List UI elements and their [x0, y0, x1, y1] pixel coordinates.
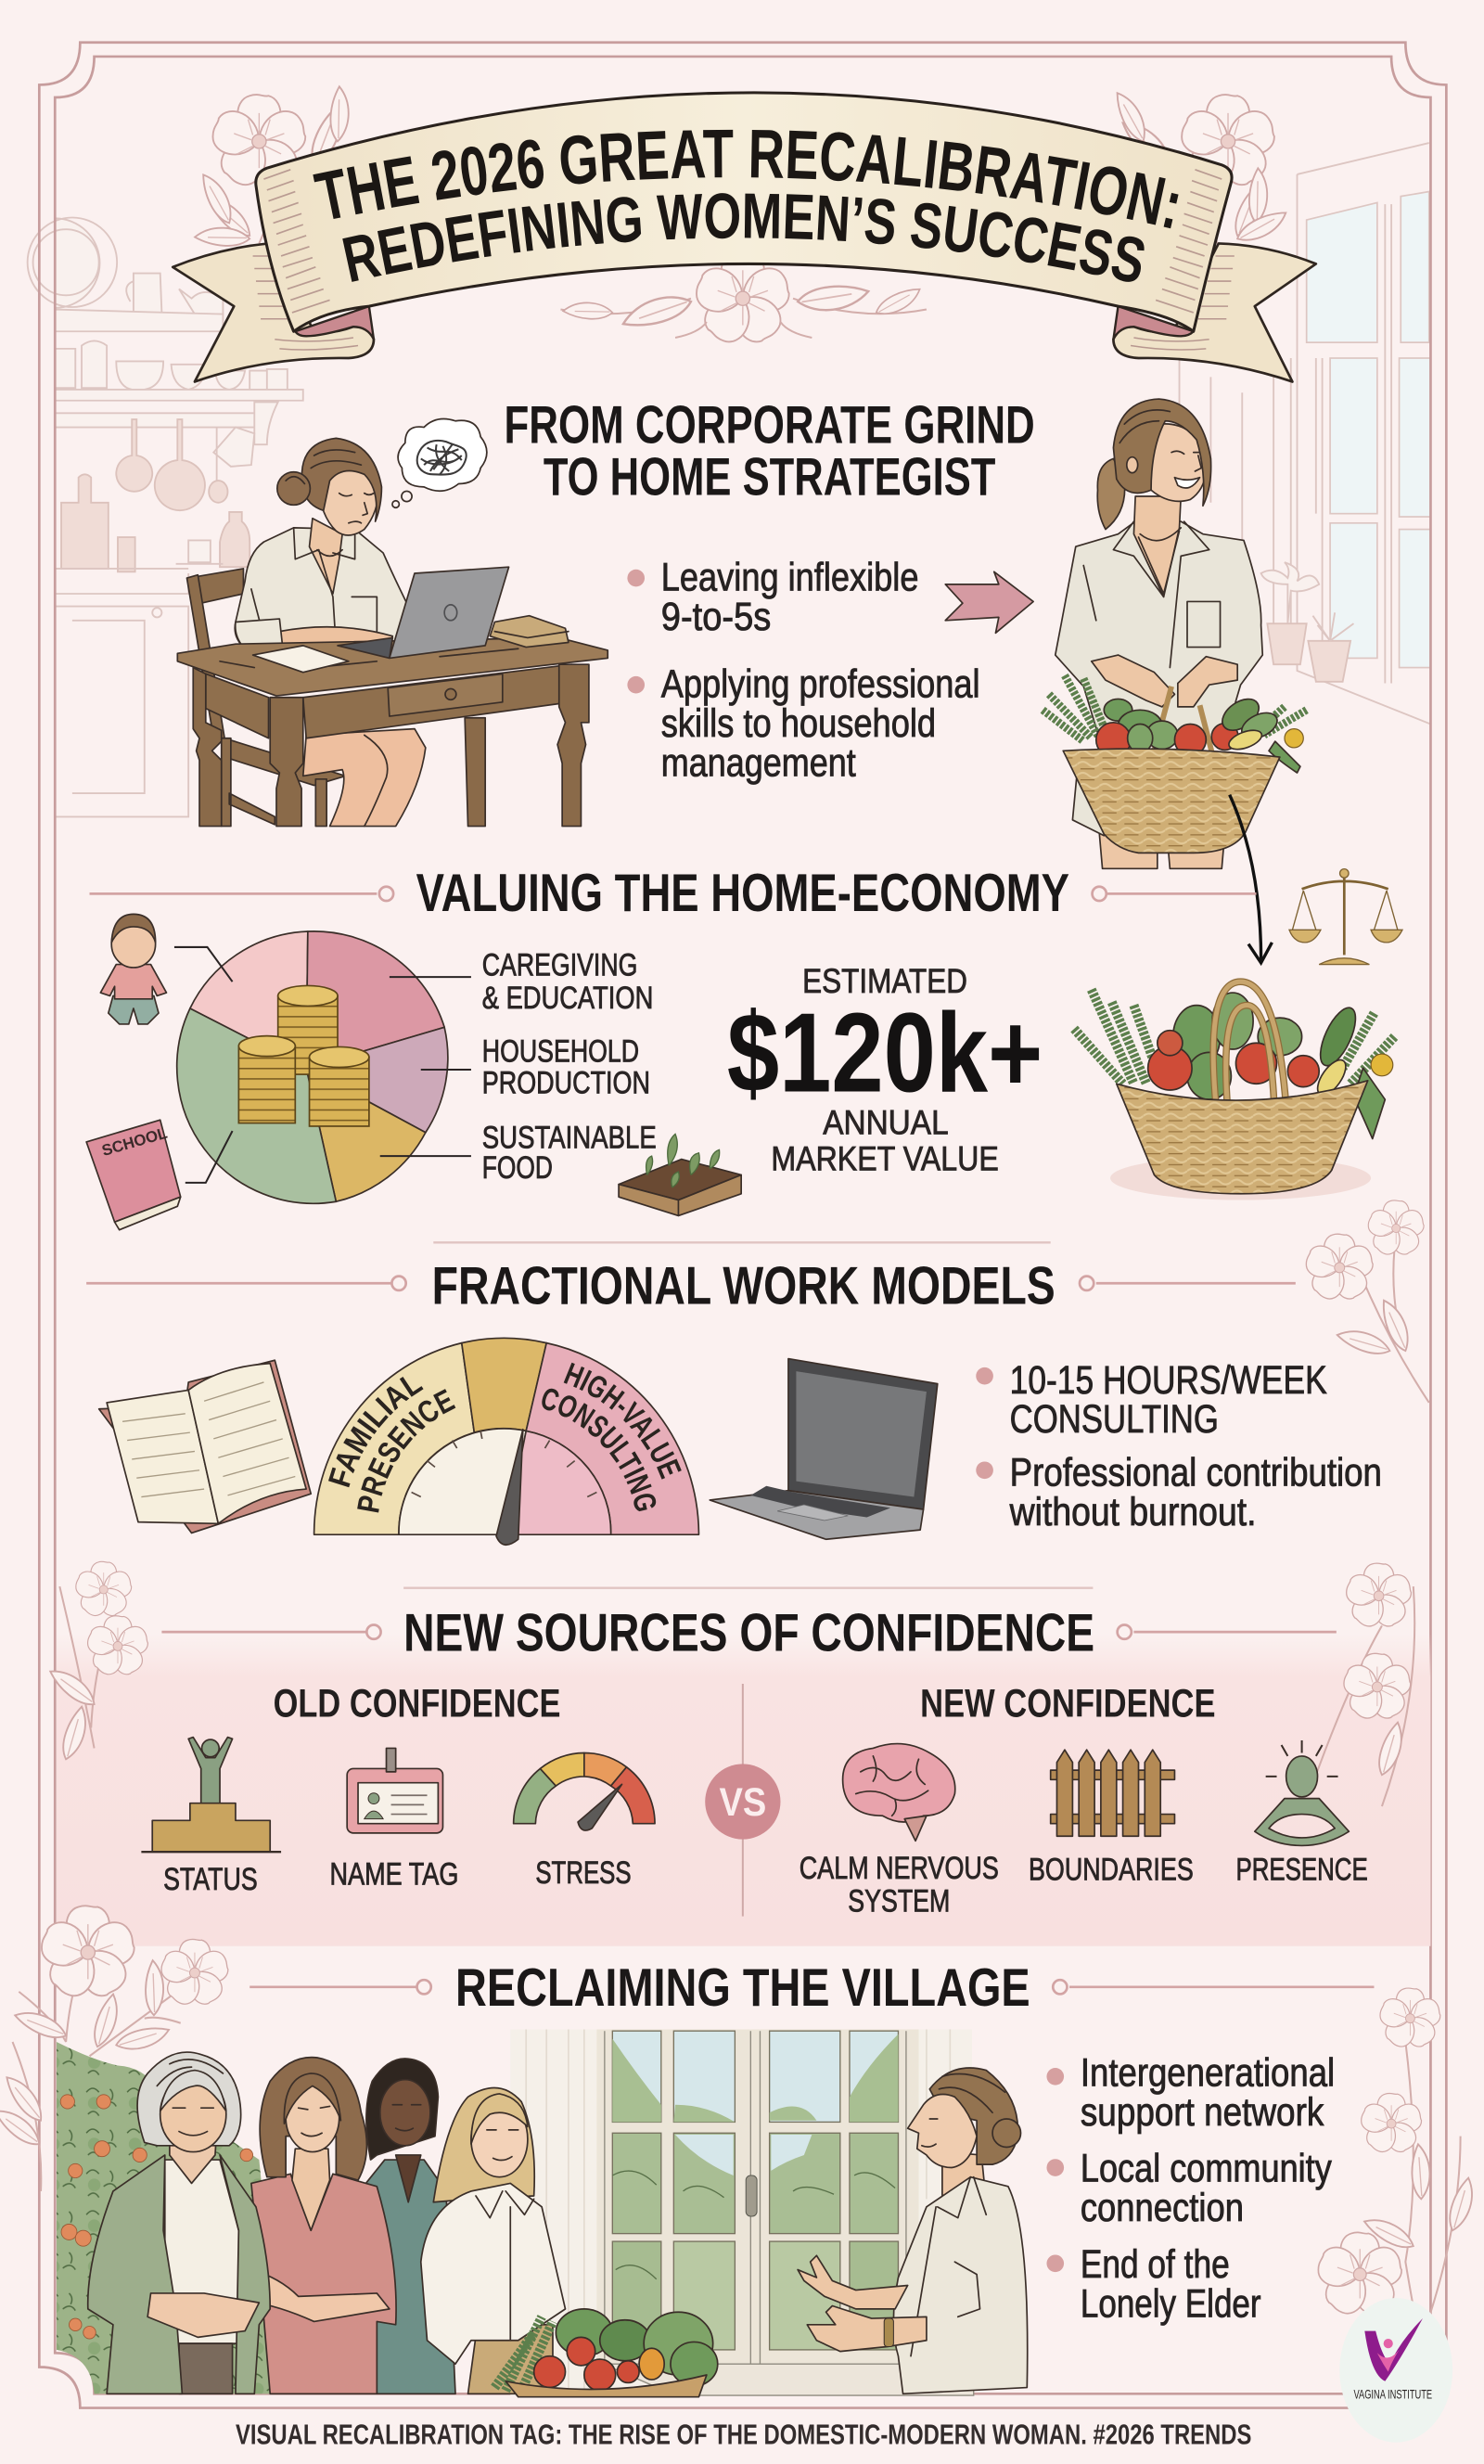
confidence labels: CALM NERVOUS [800, 1851, 999, 1886]
confidence labels: STRESS [535, 1855, 632, 1891]
forearm [279, 627, 392, 650]
illustration: reclaiming the village scene [57, 2030, 1028, 2397]
chart: fractional gauge: HIGH-VALUE [564, 1362, 682, 1480]
section 3 heading: FRACTIONAL WORK MODELS [432, 1256, 1055, 1315]
stat: market value: $120k+ [727, 990, 1043, 1116]
section 5 heading: RECLAIMING THE VILLAGE [455, 1958, 1030, 2018]
head [319, 464, 378, 535]
chart: fractional gauge [313, 1338, 699, 1546]
neck [1133, 496, 1181, 597]
vs badge: VS [719, 1780, 766, 1824]
old confidence column heading: OLD CONFIDENCE [274, 1682, 560, 1726]
woman: pink dress [249, 2058, 396, 2393]
laptop [338, 567, 509, 658]
icon: child [100, 914, 166, 1024]
shirt [1055, 521, 1262, 738]
thought bubble [392, 418, 487, 507]
hair [301, 438, 381, 521]
pie labels [482, 947, 657, 1186]
section 2 heading: VALUING THE HOME-ECONOMY [416, 864, 1069, 923]
table apron [206, 664, 571, 738]
woman: blonde in white blouse [421, 2087, 566, 2393]
stat: market value: MARKET VALUE [771, 1138, 999, 1177]
basket [1063, 749, 1280, 853]
forearms and hands [1092, 655, 1174, 707]
icon: raised garden bed [619, 1134, 741, 1215]
banner florals [195, 86, 1290, 349]
title text: THE 2026 GREAT RECALIBRATION: [313, 130, 1178, 228]
divider [403, 1587, 1093, 1589]
title banner: REDEFINING WOMEN’S SUCCESS [342, 193, 1145, 282]
icon: stress gauge [514, 1753, 655, 1830]
background window sketch [1180, 143, 1430, 725]
notebook [253, 646, 349, 673]
logo: institute badge: VAGINA INSTITUTE [1353, 2387, 1432, 2401]
woman: teal dress [365, 2059, 455, 2393]
icon: scales [1289, 869, 1402, 965]
icon: status podium [141, 1738, 281, 1852]
orchard hedge [57, 2042, 283, 2393]
confidence labels: SYSTEM [848, 1884, 950, 1919]
bullets: section 5: End of the [1081, 2242, 1230, 2286]
bullets: section 1: Applying professional [661, 662, 980, 706]
gauge label: familial presence: FAMILIAL [328, 1377, 423, 1488]
pie labels: & EDUCATION [482, 981, 653, 1016]
neck [310, 519, 342, 594]
bullets: section 5: support network [1081, 2090, 1324, 2134]
bullets: section 1: management [661, 740, 856, 784]
bullets: section 1: 9-to-5s [661, 595, 771, 638]
woman: elder in green cardigan [88, 2052, 270, 2393]
pie labels: HOUSEHOLD [482, 1034, 639, 1070]
florals right of village [1314, 1988, 1483, 2348]
basket of vegetables [494, 2309, 718, 2397]
legs [303, 729, 426, 827]
bullets: section 3: Professional contribution [1010, 1451, 1382, 1495]
title banner [171, 91, 1317, 383]
pie labels: CAREGIVING [482, 947, 637, 982]
background kitchen sketch [28, 217, 303, 816]
bullets: section 5: Intergenerational [1081, 2050, 1335, 2094]
divider [433, 1241, 1051, 1243]
arrow: pink right [945, 571, 1033, 633]
bullets: section 3: without burnout. [1009, 1490, 1256, 1534]
shirt [235, 528, 412, 648]
icon: open book [99, 1360, 311, 1533]
divider: versus [742, 1684, 744, 1917]
drawer [388, 674, 503, 716]
books [490, 616, 569, 648]
logo: institute badge [1339, 2298, 1452, 2443]
hair [1097, 458, 1125, 530]
pie leader lines [174, 947, 471, 1183]
section 4 heading: NEW SOURCES OF CONFIDENCE [403, 1603, 1094, 1662]
chart: fractional gauge: PRESENCE [357, 1389, 456, 1512]
florals beside confidence panel [49, 1561, 1414, 1806]
confidence labels: PRESENCE [1235, 1853, 1368, 1888]
confidence panel [57, 1634, 1430, 1946]
pie labels: PRODUCTION [482, 1065, 650, 1100]
confidence labels: STATUS [163, 1862, 258, 1897]
banner body [256, 93, 1232, 331]
basket handles [1154, 687, 1214, 760]
bullets: section 1: Leaving inflexible [661, 556, 918, 599]
table legs [193, 664, 589, 827]
window [510, 2030, 974, 2395]
bullets: section 1: skills to household [661, 701, 936, 745]
table top [177, 637, 608, 696]
confidence labels: BOUNDARIES [1029, 1853, 1194, 1888]
chart: fractional gauge: CONSULTING [542, 1388, 657, 1512]
bullets: section 5: connection [1081, 2186, 1244, 2229]
icon: name tag [347, 1748, 442, 1833]
coin stacks [238, 985, 369, 1126]
icon: school book: SCHOOL [100, 1124, 169, 1160]
legs [1099, 832, 1225, 868]
bullets: section 3: 10-15 HOURS/WEEK [1010, 1358, 1327, 1402]
florals left of village [0, 1906, 232, 2191]
gauge needle [496, 1430, 523, 1545]
illustration: woman at desk with laptop [177, 438, 608, 827]
section 5 heading [249, 1958, 1374, 2018]
right ribbon tail [1113, 243, 1316, 381]
left ribbon tail [173, 243, 374, 381]
confidence labels [163, 1851, 1368, 1919]
icon: presence [1255, 1740, 1349, 1845]
vs badge [705, 1764, 780, 1840]
herbs and vegetables [1043, 675, 1307, 773]
florals right of fractional work [1303, 1200, 1429, 1403]
section 1 heading [504, 395, 1035, 507]
icon: brain [843, 1744, 955, 1841]
bullets: section 3: CONSULTING [1010, 1397, 1219, 1441]
pie labels: FOOD [482, 1150, 553, 1186]
pie labels: SUSTAINABLE [482, 1121, 657, 1156]
stat: market value: ESTIMATED [802, 961, 967, 1000]
bullets: section 3 [976, 1358, 1382, 1534]
chart: home-economy pie [174, 931, 471, 1203]
arrow: basket to harvest [1230, 795, 1272, 963]
chair [186, 569, 345, 827]
section 1 heading: TO HOME STRATEGIST [544, 447, 995, 507]
icon: fence [1051, 1750, 1174, 1836]
bullets: section 1 [627, 556, 980, 784]
icon: school book [86, 1120, 181, 1230]
bullets: section 5: Local community [1081, 2147, 1332, 2190]
stat: market value: ANNUAL [823, 1102, 949, 1141]
illustration: harvest basket [1074, 982, 1394, 1200]
new confidence column heading: NEW CONFIDENCE [920, 1682, 1215, 1726]
bullets: section 5 [1046, 2050, 1335, 2325]
confidence labels: NAME TAG [330, 1857, 458, 1893]
illustration: woman with basket [1043, 399, 1307, 868]
section 1 heading: FROM CORPORATE GRIND [504, 395, 1035, 455]
bullets: section 5: Lonely Elder [1081, 2281, 1261, 2325]
section 3 heading [86, 1256, 1296, 1315]
head [1140, 424, 1207, 501]
stat: market value [727, 961, 1043, 1177]
woman: speaking in linen shirt [798, 2068, 1028, 2393]
icon: laptop [710, 1359, 938, 1539]
